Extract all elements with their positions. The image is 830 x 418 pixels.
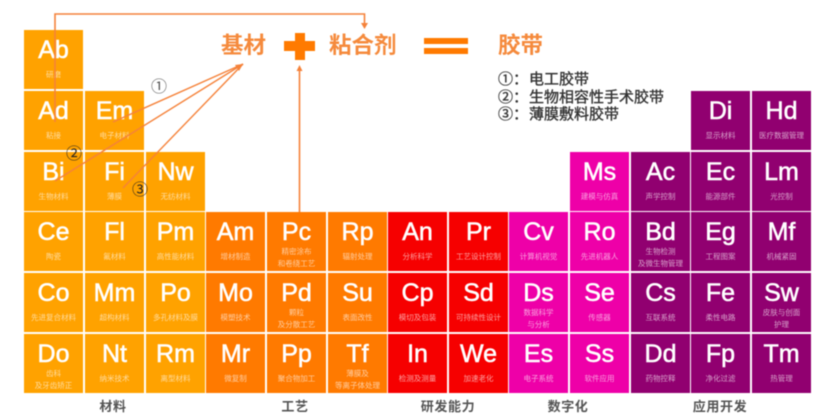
cell: Ro: 先进机器人 [581, 252, 618, 261]
cell: Cv: Cv [523, 218, 554, 246]
cell: Fp: 净化过滤 [706, 374, 736, 383]
category label: 数字化: 数字化 [548, 399, 588, 414]
cell: Es: Es [524, 340, 553, 368]
cell: Fe: Fe [706, 279, 735, 307]
legend: 1: ①： [498, 71, 528, 88]
cell: We [449, 334, 508, 393]
cell: Mf [752, 212, 811, 271]
arrow: Pc to plus [296, 64, 303, 213]
cell: Em: 电子材料 [100, 131, 130, 140]
cell: Em: Em [96, 97, 133, 125]
cell: Dd [631, 334, 690, 393]
cell: Rp: Rp [342, 218, 373, 246]
cell: We: We [460, 340, 497, 368]
cell: Ro: Ro [584, 218, 615, 246]
cell: Pp [267, 334, 326, 393]
cell: Pc: 精密涂布 [282, 247, 312, 256]
marker: 3: ③ [132, 182, 148, 199]
cell: Mo: 模塑技术 [220, 313, 250, 322]
cell: Pc: Pc [282, 218, 311, 246]
cell: Rp [328, 212, 387, 271]
cell: Es [509, 334, 568, 393]
cell: Bi [24, 152, 83, 211]
cell: Po [146, 273, 205, 332]
cell: Tm [752, 334, 811, 393]
cell: Ce: 陶瓷 [46, 252, 61, 261]
cell: Bd: Bd [645, 218, 676, 246]
cell: Pr [449, 212, 508, 271]
cell: Es: 电子系统 [524, 374, 554, 383]
cell: Fp: Fp [706, 340, 735, 368]
cell: Ab: Ab [38, 36, 69, 64]
cell: Ac [631, 152, 690, 211]
cell: Pp: Pp [281, 340, 312, 368]
cell: Rm: 离型材料 [160, 374, 190, 383]
legend: 3: 薄膜敷料胶带 [529, 106, 619, 123]
cell: Ds [509, 273, 568, 332]
icon: equals [423, 37, 469, 55]
cell: Bd: 生物检测 [646, 247, 676, 256]
cell: Sd: 可持续性设计 [456, 313, 501, 322]
cell: Ms: 建模与仿真 [581, 192, 618, 201]
cell: Mo: Mo [218, 279, 253, 307]
cell: Cp: Cp [402, 279, 433, 307]
cell: Ss [570, 334, 629, 393]
cell: Po: 多孔材料及膜 [153, 313, 198, 322]
cell: Pc [267, 212, 326, 271]
cell: Ac: Ac [646, 158, 675, 186]
cell: Ad [24, 91, 83, 150]
cell: Sd [449, 273, 508, 332]
cell: Cv [509, 212, 568, 271]
cell: Fl [85, 212, 144, 271]
cell: Pc: 和卷绕工艺 [278, 258, 315, 268]
cell: Hd: Hd [766, 97, 797, 125]
cell: Tm: Tm [763, 340, 800, 368]
cell: Co: 先进复合材料 [31, 313, 76, 322]
cell: Fi: 薄膜 [107, 192, 122, 201]
cell: Cs [631, 273, 690, 332]
cell: Ce: Ce [38, 218, 69, 246]
legend: 1: 电工胶带 [529, 71, 589, 88]
cell: Mf: Mf [768, 218, 795, 246]
cell: Co: Co [38, 279, 69, 307]
cell: Sw: Sw [764, 279, 799, 307]
cell: Mm: 超构材料 [100, 313, 130, 322]
cell: Pd [267, 273, 326, 332]
cell: Mm [85, 273, 144, 332]
cell: Mo [206, 273, 265, 332]
cell: Pd: 颗粒 [289, 308, 304, 317]
cell: Di: Di [709, 97, 732, 125]
cell: Do: 及牙齿矫正 [35, 380, 72, 390]
cell: Ro [570, 212, 629, 271]
heading: 基材: 基材 [221, 33, 266, 58]
cell: Do [24, 334, 83, 393]
cell: Nw: 无纺材料 [160, 192, 190, 201]
cell: Fi [85, 152, 144, 211]
cell: Cv: 计算机视觉 [520, 252, 557, 261]
marker: 2: ② [66, 146, 82, 163]
cell: Tf: 薄膜及 [346, 369, 369, 378]
cell: Fe: 柔性电路 [706, 313, 736, 322]
cell: Ab [24, 30, 83, 89]
cell: Rm: Rm [156, 340, 195, 368]
cell: Tf: Tf [346, 340, 369, 368]
cell: Nt: 纳米技术 [100, 374, 130, 383]
cell: Eg: 工程图案 [706, 252, 736, 261]
arrow: adhesive connector from Ad to 粘合剂 [53, 12, 368, 122]
cell: Am: Am [217, 218, 254, 246]
cell: Pr: 工艺设计控制 [456, 252, 501, 261]
cell: Am [206, 212, 265, 271]
cell: Co [24, 273, 83, 332]
cell: Se: 传感器 [588, 313, 611, 322]
cell: Ms [570, 152, 629, 211]
legend: 2: 生物相容性手术胶带 [529, 89, 664, 106]
cell: Mf: 机械紧固 [766, 252, 796, 261]
cell: We: 加速老化 [464, 374, 494, 383]
cell: Ec: 能源部件 [706, 192, 736, 201]
cell: Ad: 粘接 [46, 131, 61, 140]
cell: Pr: Pr [466, 218, 491, 246]
cell: Rm [146, 334, 205, 393]
cell: Mr [206, 334, 265, 393]
cell: Bi: Bi [42, 158, 65, 186]
marker: 1: ① [151, 79, 167, 96]
cell: Cs: Cs [645, 279, 676, 307]
cell: Di [691, 91, 750, 150]
cell: Di: 显示材料 [706, 131, 736, 140]
cell: Rp: 辐射处理 [342, 252, 372, 261]
category label: 工艺: 工艺 [281, 399, 309, 414]
cell: Ac: 声学控制 [646, 192, 676, 201]
cell: Fi: Fi [104, 158, 125, 186]
cell: Mm: Mm [94, 279, 135, 307]
cell: Lm: 光控制 [770, 192, 793, 201]
cell: Fl: Fl [104, 218, 125, 246]
heading: 胶带: 胶带 [498, 33, 543, 58]
cell: Mr: Mr [221, 340, 250, 368]
cell: Tf [328, 334, 387, 393]
cell: Em [85, 91, 144, 150]
cell: Bd: 及微生物管理 [638, 258, 683, 268]
arrows: substrate lines to 基材 [54, 62, 244, 188]
cell: Su: Su [342, 279, 373, 307]
cell: In: In [407, 340, 428, 368]
cell: Se: Se [584, 279, 615, 307]
cell: An: 分析科学 [402, 252, 432, 261]
cell: Cp [388, 273, 447, 332]
cell: Hd [752, 91, 811, 150]
cell: In [388, 334, 447, 393]
cell: Pp: 聚合物加工 [278, 374, 315, 383]
cell: Ab: 研磨 [46, 70, 61, 79]
cell: Ss: 软件应用 [584, 374, 614, 383]
cell: Fl: 氟材料 [103, 252, 126, 261]
cell: Sw: 护理 [774, 320, 789, 328]
cell: Tm: 热管理 [770, 374, 793, 383]
cell: Su: 表面改性 [342, 313, 372, 322]
cell: Ad: Ad [38, 97, 69, 125]
cell: Ss: Ss [585, 340, 614, 368]
cell: Eg: Eg [705, 218, 736, 246]
cell: Bi: 生物材料 [38, 192, 68, 201]
legend: 1 [498, 70, 590, 88]
cell: Nt: Nt [102, 340, 127, 368]
cell: An [388, 212, 447, 271]
cell: Eg [691, 212, 750, 271]
legend: 2: ②： [498, 89, 528, 106]
cell: Bd [631, 212, 690, 271]
cell: Fe [691, 273, 750, 332]
legend: 3: ③： [498, 106, 528, 123]
cell: Nw [146, 152, 205, 211]
cell: Sw: 皮肤与创面 [763, 308, 800, 317]
category label: 材料: 材料 [99, 399, 127, 414]
cell: Su [328, 273, 387, 332]
cell: Pm: Pm [157, 218, 194, 246]
heading: 粘合剂: 粘合剂 [329, 33, 397, 58]
cell: Do: 齿科 [46, 369, 61, 378]
cell: Mr: 微复制 [224, 374, 247, 383]
cell: Po: Po [160, 279, 191, 307]
cell: Dd: 药物控释 [646, 374, 676, 383]
cell: Pm: 高性能材料 [157, 252, 194, 261]
cell: Ec [691, 152, 750, 211]
cell: Se [570, 273, 629, 332]
cell: Pd: Pd [281, 279, 312, 307]
cell: Dd: Dd [645, 340, 676, 368]
cell: In: 检测及测量 [399, 374, 436, 383]
cell: Pd: 及分散工艺 [278, 320, 315, 328]
cell: Tf: 等离子体处理 [335, 380, 380, 390]
legend: 3 [498, 105, 620, 123]
cell: Ds: 与分析 [527, 320, 550, 328]
cell: Nw: Nw [157, 158, 194, 186]
cell: Nt [85, 334, 144, 393]
cell: Sd: Sd [463, 279, 494, 307]
icon: plus [283, 32, 316, 61]
cell: Fp [691, 334, 750, 393]
cell: Ce [24, 212, 83, 271]
cell: Hd: 医疗数据管理 [759, 131, 804, 140]
category label: 研发能力: 研发能力 [421, 399, 475, 414]
cell: An: An [402, 218, 433, 246]
cell: Sw [752, 273, 811, 332]
cell: Cp: 模切及包装 [399, 313, 436, 322]
cell: Lm [752, 152, 811, 211]
cell: Ec: Ec [706, 158, 735, 186]
cell: Ds: 数据科学 [524, 308, 554, 317]
cell: Do: Do [38, 340, 69, 368]
cell: Lm: Lm [764, 158, 799, 186]
cell: Ms: Ms [583, 158, 616, 186]
cell: Cs: 互联系统 [646, 313, 676, 322]
cell: Ds: Ds [523, 279, 554, 307]
cell: Pm [146, 212, 205, 271]
category label: 应用开发: 应用开发 [693, 399, 747, 414]
cell: Am: 增材制造 [220, 252, 250, 261]
